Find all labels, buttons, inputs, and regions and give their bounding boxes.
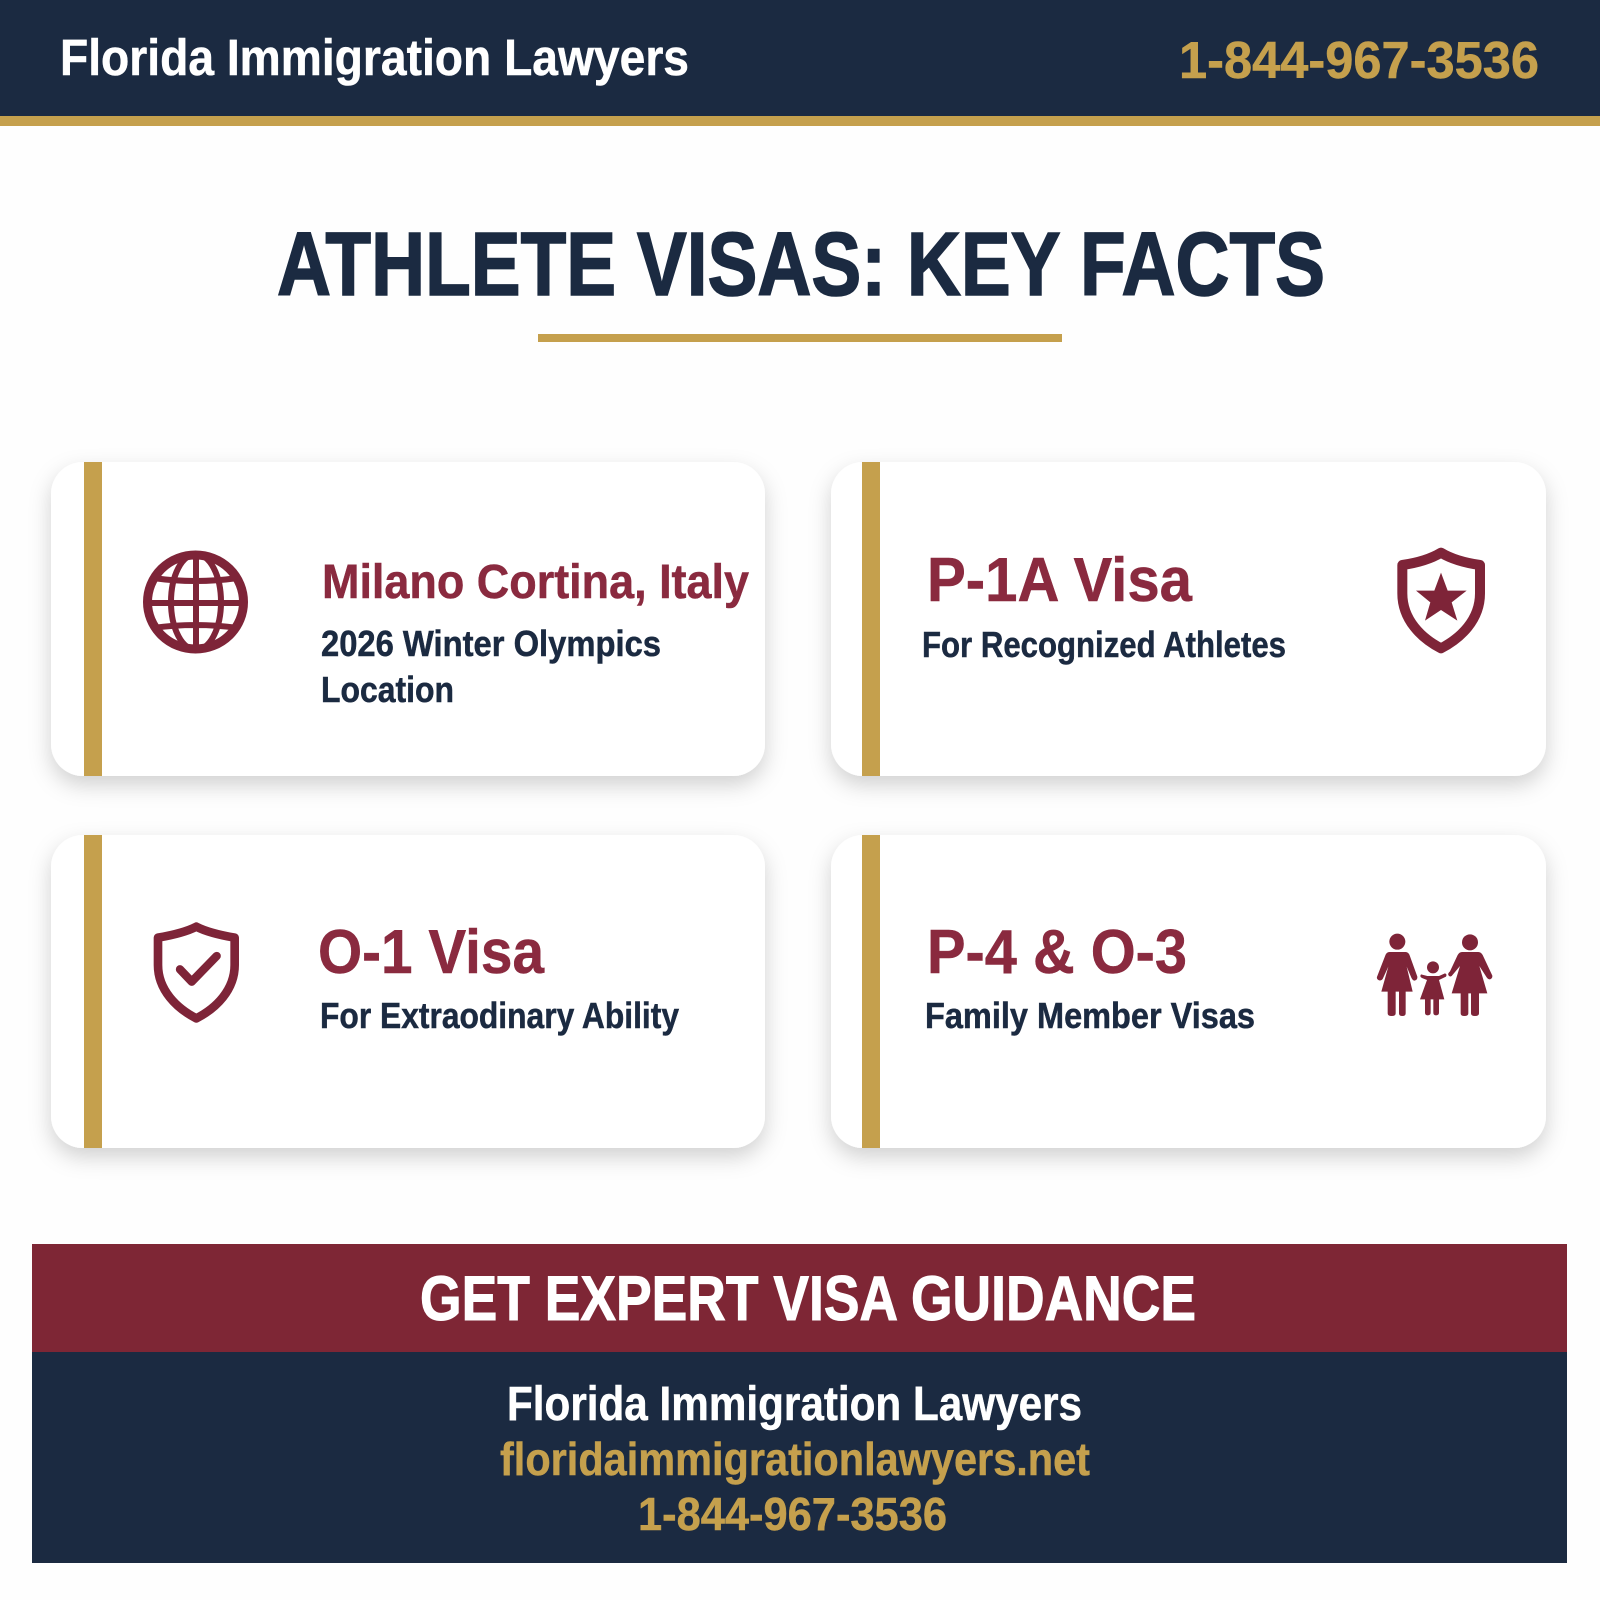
icon: shield with check (158, 927, 235, 1018)
call-to-action banner: GET EXPERT VISA GUIDANCE (420, 1264, 1196, 1334)
icon: shield with star (1402, 553, 1480, 648)
contact firm name: Florida Immigration Lawyers (507, 1378, 1082, 1431)
card description (321, 623, 661, 710)
icon: family (1377, 934, 1492, 1016)
panel: P-4 and O-3 (831, 835, 1546, 1148)
card heading: P-1A Visa (927, 546, 1192, 615)
contact panel (32, 1352, 1567, 1563)
panel: O-1 Visa (51, 835, 765, 1148)
icon: globe (147, 554, 244, 650)
title (277, 215, 1325, 342)
call-to-action banner (32, 1244, 1567, 1352)
card description: For Recognized Athletes (922, 624, 1286, 665)
panel: Milano Cortina (51, 462, 765, 776)
website: floridaimmigrationlawyers.net (500, 1433, 1090, 1485)
card heading: Milano Cortina, Italy (322, 556, 749, 609)
header bar (0, 0, 1600, 126)
panel: P-1A Visa (831, 462, 1546, 776)
card description: For Extraodinary Ability (320, 995, 679, 1036)
card heading: P-4 & O-3 (927, 918, 1187, 987)
card description: 2026 Winter Olympics (321, 623, 661, 664)
card description: Location (321, 669, 454, 710)
title: ATHLETE VISAS: KEY FACTS (277, 215, 1325, 315)
contact phone number: 1-844-967-3536 (638, 1488, 947, 1540)
card description: Family Member Visas (925, 995, 1255, 1036)
header firm name: Florida Immigration Lawyers (60, 29, 689, 86)
header phone number: 1-844-967-3536 (1179, 32, 1539, 90)
card heading: O-1 Visa (318, 918, 544, 987)
